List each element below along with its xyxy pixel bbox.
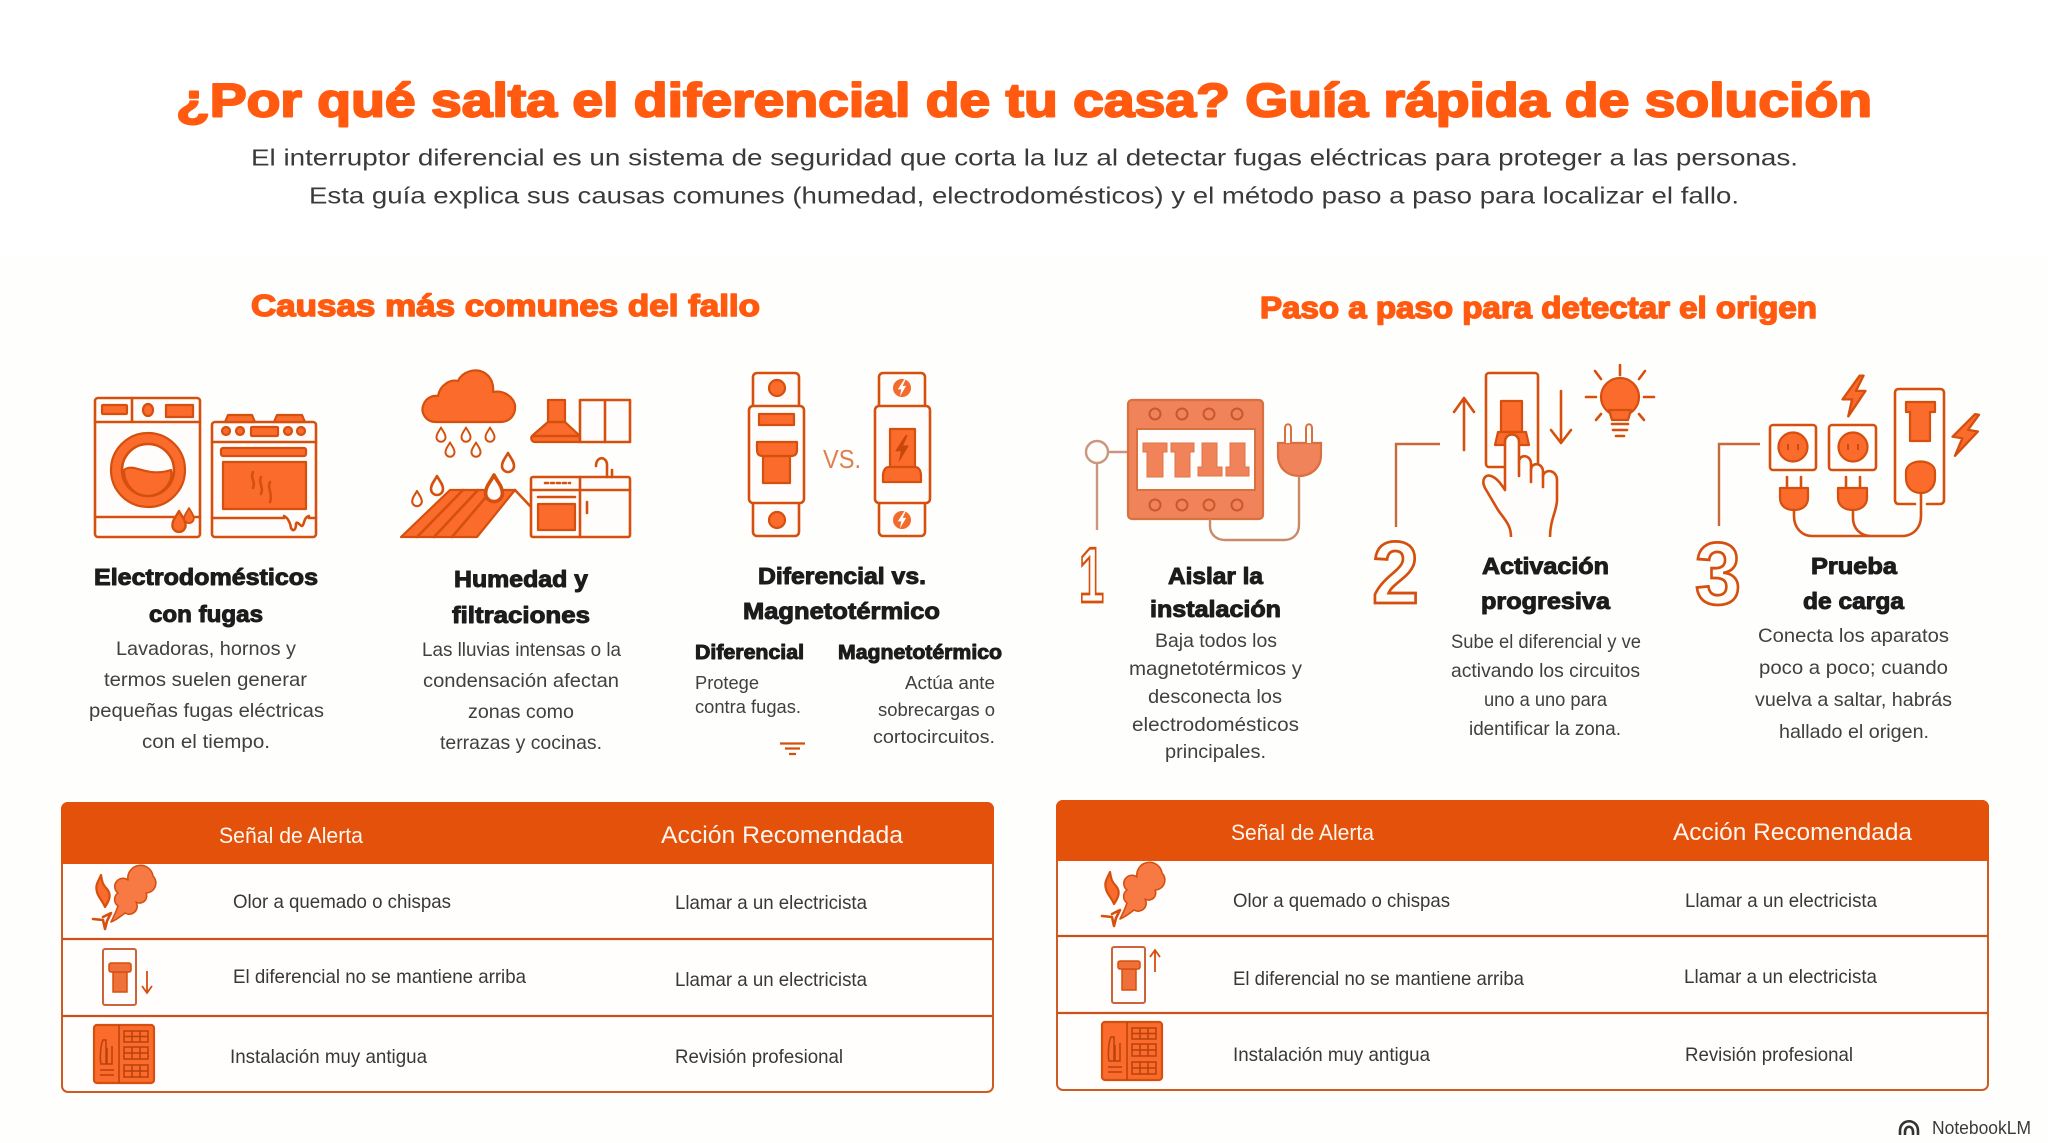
heading: progresiva xyxy=(1481,588,1610,614)
body text: magnetotérmicos y xyxy=(1129,658,1302,680)
panel: paso 2 xyxy=(1372,365,1654,740)
header labels: Acción Recomendada xyxy=(1673,819,1913,846)
table header xyxy=(1056,800,1989,861)
heading: filtraciones xyxy=(452,602,590,628)
label: VS.: VS. xyxy=(823,444,861,474)
heading: con fugas xyxy=(149,601,263,627)
body text xyxy=(1755,625,1952,743)
column: diferencial: Protege xyxy=(695,672,759,693)
body text: Baja todos los xyxy=(1155,630,1277,652)
body text: Lavadoras, hornos y xyxy=(116,638,296,660)
body text: principales. xyxy=(1165,741,1266,763)
column: magnetotérmico: sobrecargas o xyxy=(878,699,995,720)
icon: magnetotérmico xyxy=(875,373,930,536)
subtitle xyxy=(251,144,1798,208)
body text: Conecta los aparatos xyxy=(1758,625,1949,647)
table: señales derecha xyxy=(1056,800,1989,1090)
header labels: Señal de Alerta xyxy=(219,823,364,848)
body text: desconecta los xyxy=(1148,686,1282,708)
row text xyxy=(233,966,867,991)
heading xyxy=(1481,553,1610,614)
icon: activar interruptor xyxy=(1454,365,1654,537)
icon: humo y chispas xyxy=(1102,862,1165,926)
header labels xyxy=(219,822,904,849)
table: señales izquierda xyxy=(61,802,994,1092)
icon: cuadro eléctrico xyxy=(1086,400,1321,540)
row text xyxy=(1233,1044,1853,1066)
row text: Llamar a un electricista xyxy=(1685,890,1877,912)
icon: cuadro antiguo xyxy=(94,1025,154,1083)
heading: paso a paso: Paso a paso para detectar el origen xyxy=(1260,290,1817,325)
row text: Instalación muy antigua xyxy=(1233,1044,1430,1066)
icon: cuadro antiguo xyxy=(1102,1022,1162,1080)
row text: Revisión profesional xyxy=(1685,1044,1853,1066)
body text: termos suelen generar xyxy=(104,669,308,691)
panel: humedad xyxy=(401,370,630,754)
body text: uno a uno para xyxy=(1484,689,1607,711)
column: magnetotérmico: Actúa ante xyxy=(905,672,995,693)
icon: interruptor abajo xyxy=(103,949,152,1005)
body text: electrodomésticos xyxy=(1132,714,1299,736)
body text xyxy=(1129,630,1302,763)
body text: terrazas y cocinas. xyxy=(440,732,602,754)
body text: condensación afectan xyxy=(423,670,619,692)
heading xyxy=(94,564,318,627)
number 1: 1 xyxy=(1079,531,1104,619)
body text xyxy=(1451,631,1641,740)
header labels: Acción Recomendada xyxy=(661,822,904,849)
panel: electrodomésticos xyxy=(89,398,324,753)
row text: Llamar a un electricista xyxy=(675,969,867,991)
icon: toma de tierra xyxy=(780,744,805,754)
row text xyxy=(233,891,867,914)
number 3: 3 xyxy=(1695,524,1741,623)
panel: paso 3 xyxy=(1695,376,1981,743)
connector xyxy=(1396,444,1440,527)
row text: Llamar a un electricista xyxy=(1684,966,1877,988)
number 2: 2 xyxy=(1372,523,1419,622)
body text: identificar la zona. xyxy=(1469,718,1621,740)
body text: pequeñas fugas eléctricas xyxy=(89,700,324,722)
row text: Instalación muy antigua xyxy=(230,1046,427,1068)
row text xyxy=(1233,966,1877,990)
heading: Magnetotérmico xyxy=(743,598,940,624)
column: magnetotérmico xyxy=(838,642,1002,747)
body text: hallado el origen. xyxy=(1779,721,1929,743)
row text: Olor a quemado o chispas xyxy=(1233,890,1450,912)
body text: con el tiempo. xyxy=(142,731,270,753)
body text xyxy=(89,638,324,753)
heading: instalación xyxy=(1150,596,1281,622)
connector xyxy=(1719,444,1760,526)
body text: zonas como xyxy=(468,701,574,723)
column: magnetotérmico: Magnetotérmico xyxy=(838,642,1002,664)
heading xyxy=(1150,563,1281,622)
heading: Aislar la xyxy=(1168,563,1263,589)
heading xyxy=(452,566,590,628)
row text: El diferencial no se mantiene arriba xyxy=(233,966,526,988)
body text: activando los circuitos xyxy=(1451,660,1640,682)
row text xyxy=(230,1046,843,1068)
icon: lluvia, tejado y cocina xyxy=(401,370,630,537)
row text: Olor a quemado o chispas xyxy=(233,891,451,913)
heading: Diferencial vs. xyxy=(758,563,926,589)
body text: Las lluvias intensas o la xyxy=(422,639,621,661)
table header xyxy=(61,802,994,864)
subtitle: El interruptor diferencial es un sistema de seguridad que corta la luz al detectar fugas eléctricas para proteger a las personas. xyxy=(251,144,1798,170)
icon: lavadora y horno xyxy=(95,398,316,537)
body text: poco a poco; cuando xyxy=(1759,657,1948,679)
subtitle: Esta guía explica sus causas comunes (humedad, electrodomésticos) y el método paso a paso para localizar el fallo. xyxy=(309,182,1739,208)
body text xyxy=(422,639,621,754)
column: diferencial xyxy=(695,642,804,717)
icon: enchufes y carga xyxy=(1770,376,1981,536)
heading: de carga xyxy=(1803,588,1904,614)
icon: diferencial xyxy=(749,373,804,536)
panel: paso 1 xyxy=(1079,400,1321,763)
panel: diferencial vs magnetotérmico xyxy=(695,373,1002,754)
icon: humo y chispas xyxy=(93,865,156,929)
column: magnetotérmico: cortocircuitos. xyxy=(873,726,995,747)
header labels: Señal de Alerta xyxy=(1231,820,1375,845)
icon: interruptor arriba xyxy=(1112,947,1160,1003)
heading xyxy=(743,563,940,624)
heading: Electrodomésticos xyxy=(94,564,318,590)
column: diferencial: Diferencial xyxy=(695,642,804,664)
body text: vuelva a saltar, habrás xyxy=(1755,689,1952,711)
heading xyxy=(1803,553,1904,614)
heading: Humedad y xyxy=(454,566,588,592)
row text xyxy=(1233,890,1877,912)
title: ¿Por qué salta el diferencial de tu casa? Guía rápida de solución xyxy=(176,74,1872,126)
heading: Prueba xyxy=(1811,553,1897,579)
row text: Llamar a un electricista xyxy=(675,892,867,914)
heading: Activación xyxy=(1482,553,1609,579)
column: diferencial: contra fugas. xyxy=(695,696,801,717)
row text: Revisión profesional xyxy=(675,1046,843,1068)
header labels xyxy=(1231,819,1913,846)
heading: causas: Causas más comunes del fallo xyxy=(251,288,760,323)
logo: NotebookLM: NotebookLM xyxy=(1932,1118,2031,1138)
row text: El diferencial no se mantiene arriba xyxy=(1233,968,1524,990)
body text: Sube el diferencial y ve xyxy=(1451,631,1641,653)
